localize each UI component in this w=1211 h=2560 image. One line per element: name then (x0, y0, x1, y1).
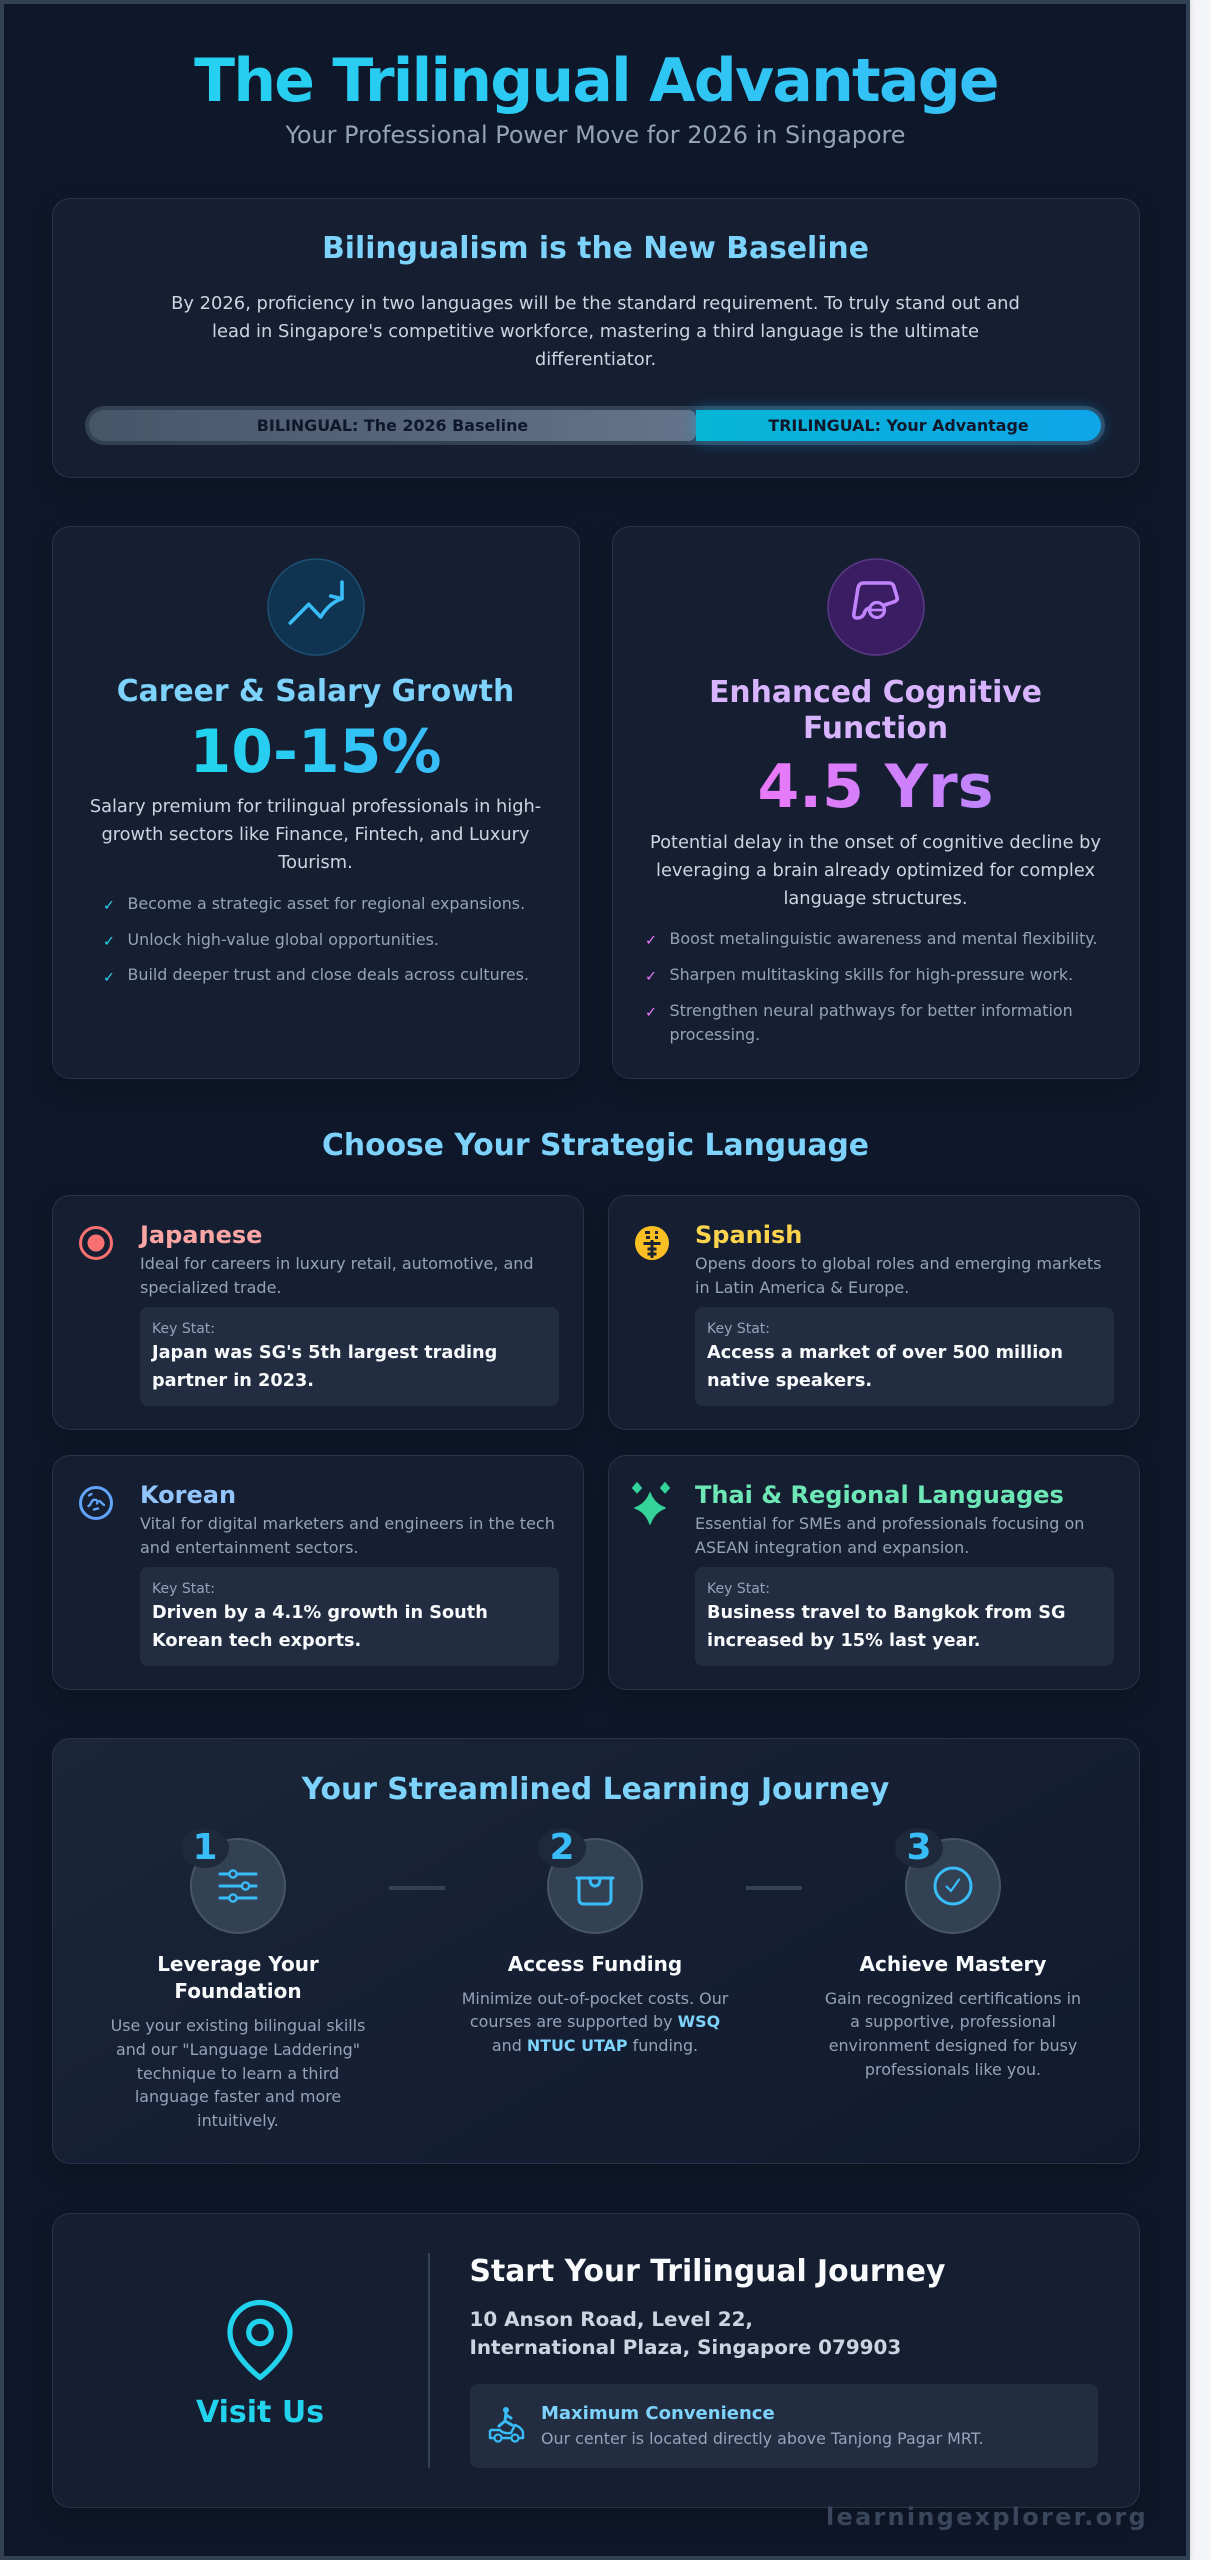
bar segment: trilingual (696, 410, 1101, 441)
text block: cognitive description: language structures. (783, 888, 968, 909)
stat: salary premium: 10-15% (189, 716, 442, 786)
callout title: Maximum Convenience (541, 2403, 775, 2424)
text: japanese description: Ideal for careers in luxury retail, automotive, and (140, 1254, 534, 1273)
stat text (151, 1343, 497, 1391)
list: career benefits (103, 894, 529, 986)
icon: japan (79, 1226, 113, 1260)
heading: cognitive: Enhanced Cognitive (709, 674, 1042, 710)
icon: spain (635, 1226, 669, 1260)
benefit (670, 1000, 1073, 1044)
icon: sliders (218, 1869, 258, 1903)
icon: funding bag (576, 1876, 614, 1906)
step 3 circle (905, 1838, 1001, 1934)
stat text: increased by 15% last year. (707, 1631, 980, 1651)
icon: scooter (488, 2407, 524, 2443)
stat text (152, 1603, 488, 1651)
heading: cognitive: Function (803, 710, 948, 746)
step 1 title: Leverage Your (157, 1952, 319, 1976)
icon: brain (827, 558, 925, 656)
panel: spanish (608, 1195, 1140, 1430)
panel: korean (52, 1455, 584, 1690)
stat: years delay (612, 751, 1139, 823)
step 2 text: courses are supported by WSQ (470, 2012, 720, 2031)
stat text (707, 1343, 1063, 1391)
heading: spanish: Spanish (695, 1221, 802, 1249)
bar segment: bilingual: BILINGUAL: The 2026 Baseline (257, 416, 528, 435)
step 3 text: environment designed for busy (829, 2036, 1077, 2055)
step 2 text (462, 1988, 728, 2055)
text block: baseline description: differentiator. (535, 349, 656, 370)
icon: korea (79, 1486, 113, 1520)
text: spanish description: Opens doors to global roles and emerging markets (695, 1254, 1102, 1273)
check: ✓ (103, 934, 115, 950)
check: ✓ (645, 969, 657, 985)
chart: bilingual to trilingual bar (85, 406, 1105, 445)
stat text: native speakers. (707, 1371, 872, 1391)
heading: career: Career & Salary Growth (117, 674, 514, 709)
panel: japanese (52, 1195, 584, 1430)
label: Key Stat: (707, 1321, 770, 1337)
step 2 text: Minimize out-of-pocket costs. Our (462, 1988, 728, 2008)
text: thai description: Essential for SMEs and professionals focusing on (695, 1514, 1084, 1533)
text block: baseline description: By 2026, proficiency in two languages will be the standard requirement. To truly stand out and (171, 293, 1020, 314)
icon: sparkle (632, 1482, 670, 1525)
step 1 title: Foundation (174, 1979, 302, 2003)
icon: location pin (227, 2300, 293, 2380)
step 1 text (111, 2016, 365, 2130)
panel: learning journey (52, 1738, 1140, 2164)
heading: strategic language: Choose Your Strategic Language (322, 1128, 869, 1163)
connector (389, 1886, 445, 1890)
icon: growth chart (267, 558, 365, 656)
step 2 title: Access Funding (508, 1952, 682, 1976)
stat text: Japan was SG's 5th largest trading (152, 1343, 497, 1363)
step 3 number (895, 1828, 943, 1868)
bar segment: trilingual: TRILINGUAL: Your Advantage (768, 416, 1029, 435)
text block: career description (90, 796, 541, 873)
text block: cognitive description (650, 832, 1101, 909)
stat: salary premium (52, 716, 579, 788)
step 1 text: technique to learn a third (137, 2064, 339, 2083)
label: Key Stat: (152, 1321, 215, 1337)
callout: korean key stat (140, 1567, 559, 1666)
title: The Trilingual Advantage (194, 46, 998, 116)
list: cognitive benefits (645, 929, 1098, 1044)
text block: baseline description (171, 293, 1020, 370)
address: 10 Anson Road, Level 22, (470, 2308, 753, 2330)
check: ✓ (103, 970, 115, 986)
step 2 text: and NTUC UTAP funding. (492, 2036, 698, 2055)
heading: baseline: Bilingualism is the New Baseline (322, 231, 869, 266)
callout: spanish key stat (695, 1307, 1114, 1406)
text block: career description: growth sectors like Finance, Fintech, and Luxury (101, 824, 530, 845)
text: thai description (695, 1514, 1084, 1557)
step 1 text: and our "Language Laddering" (116, 2040, 360, 2059)
heading: thai: Thai & Regional Languages (695, 1481, 1064, 1509)
address: International Plaza, Singapore 079903 (470, 2336, 901, 2358)
stat text: Access a market of over 500 million (707, 1343, 1063, 1363)
step 2 circle (547, 1838, 643, 1934)
label: Key Stat: (152, 1581, 215, 1597)
text block: career description: Tourism. (278, 852, 353, 873)
icon: check circle (934, 1866, 972, 1906)
panel: bilingualism baseline (52, 198, 1140, 478)
step 3 text (825, 1988, 1081, 2079)
text: spanish description: in Latin America & Europe. (695, 1278, 909, 1297)
heading: japanese: Japanese (140, 1221, 262, 1249)
label: Key Stat: (707, 1581, 770, 1597)
step 3 number: 3 (906, 1827, 932, 1868)
step 2 number: 2 (549, 1827, 575, 1868)
text: korean description: and entertainment sectors. (140, 1538, 358, 1557)
text block: cognitive description: leveraging a brain already optimized for complex (656, 860, 1095, 881)
check: ✓ (103, 898, 115, 914)
heading: start journey: Start Your Trilingual Journey (470, 2254, 945, 2289)
text: korean description: Vital for digital marketers and engineers in the tech (140, 1514, 555, 1533)
callout: japanese key stat (140, 1307, 559, 1406)
check: ✓ (645, 933, 657, 949)
stat text (707, 1603, 1066, 1651)
step 1 text: language faster and more (135, 2087, 341, 2106)
step 1 number: 1 (192, 1827, 218, 1868)
stat: years delay: 4.5 Yrs (758, 752, 993, 822)
benefit: Unlock high-value global opportunities. (128, 930, 439, 949)
text block: career description: Salary premium for trilingual professionals in high- (90, 796, 541, 817)
step 3 title: Achieve Mastery (860, 1952, 1046, 1976)
benefit: Sharpen multitasking skills for high-pressure work. (670, 965, 1073, 984)
stat text: partner in 2023. (152, 1371, 314, 1391)
text: japanese description: specialized trade. (140, 1278, 282, 1297)
panel: enhanced cognitive function (612, 526, 1140, 1079)
panel: career and salary growth (52, 526, 580, 1079)
step 1 text: Use your existing bilingual skills (111, 2016, 365, 2035)
stat text: Business travel to Bangkok from SG (707, 1603, 1066, 1623)
step 1 text: intuitively. (197, 2111, 279, 2130)
step 1 circle (190, 1838, 286, 1934)
heading: korean: Korean (140, 1481, 236, 1509)
step 3 text: professionals like you. (865, 2060, 1041, 2079)
text: korean description (140, 1514, 555, 1557)
text: thai description: ASEAN integration and expansion. (695, 1538, 969, 1557)
heading: journey: Your Streamlined Learning Journey (302, 1772, 889, 1807)
connector (746, 1886, 802, 1890)
text block: baseline description: lead in Singapore's competitive workforce, mastering a third language is the ultimate (212, 321, 979, 342)
text block: cognitive description: Potential delay in the onset of cognitive decline by (650, 832, 1101, 853)
text: spanish description (695, 1254, 1102, 1297)
subtitle: Your Professional Power Move for 2026 in Singapore (286, 121, 906, 149)
check: ✓ (645, 1005, 657, 1021)
benefit: Become a strategic asset for regional expansions. (128, 894, 525, 913)
stat text: Driven by a 4.1% growth in South (152, 1603, 488, 1623)
panel: thai and regional (608, 1455, 1140, 1690)
divider (428, 2253, 430, 2468)
callout: maximum convenience (470, 2384, 1098, 2468)
benefit: Boost metalinguistic awareness and mental flexibility. (670, 929, 1098, 948)
address (470, 2308, 901, 2358)
panel: visit us (52, 2213, 1140, 2508)
stat text: Korean tech exports. (152, 1631, 361, 1651)
step 1 title (157, 1952, 319, 2003)
step 1 number (181, 1828, 229, 1868)
benefit: Build deeper trust and close deals across cultures. (128, 965, 529, 984)
text: japanese description (140, 1254, 534, 1297)
bar segment: bilingual (89, 410, 696, 441)
callout: thai key stat (695, 1567, 1114, 1666)
heading: visit us: Visit Us (196, 2394, 324, 2430)
benefit: Strengthen neural pathways for better information (670, 1000, 1073, 1020)
benefit: processing. (670, 1024, 760, 1044)
watermark: learningexplorer.org (826, 2503, 1148, 2531)
step 2 number (538, 1828, 586, 1868)
step 3 text: a supportive, professional (850, 2012, 1056, 2031)
callout text: Our center is located directly above Tanjong Pagar MRT. (541, 2429, 984, 2448)
heading: cognitive (709, 674, 1042, 746)
step 3 text: Gain recognized certifications in (825, 1988, 1081, 2008)
